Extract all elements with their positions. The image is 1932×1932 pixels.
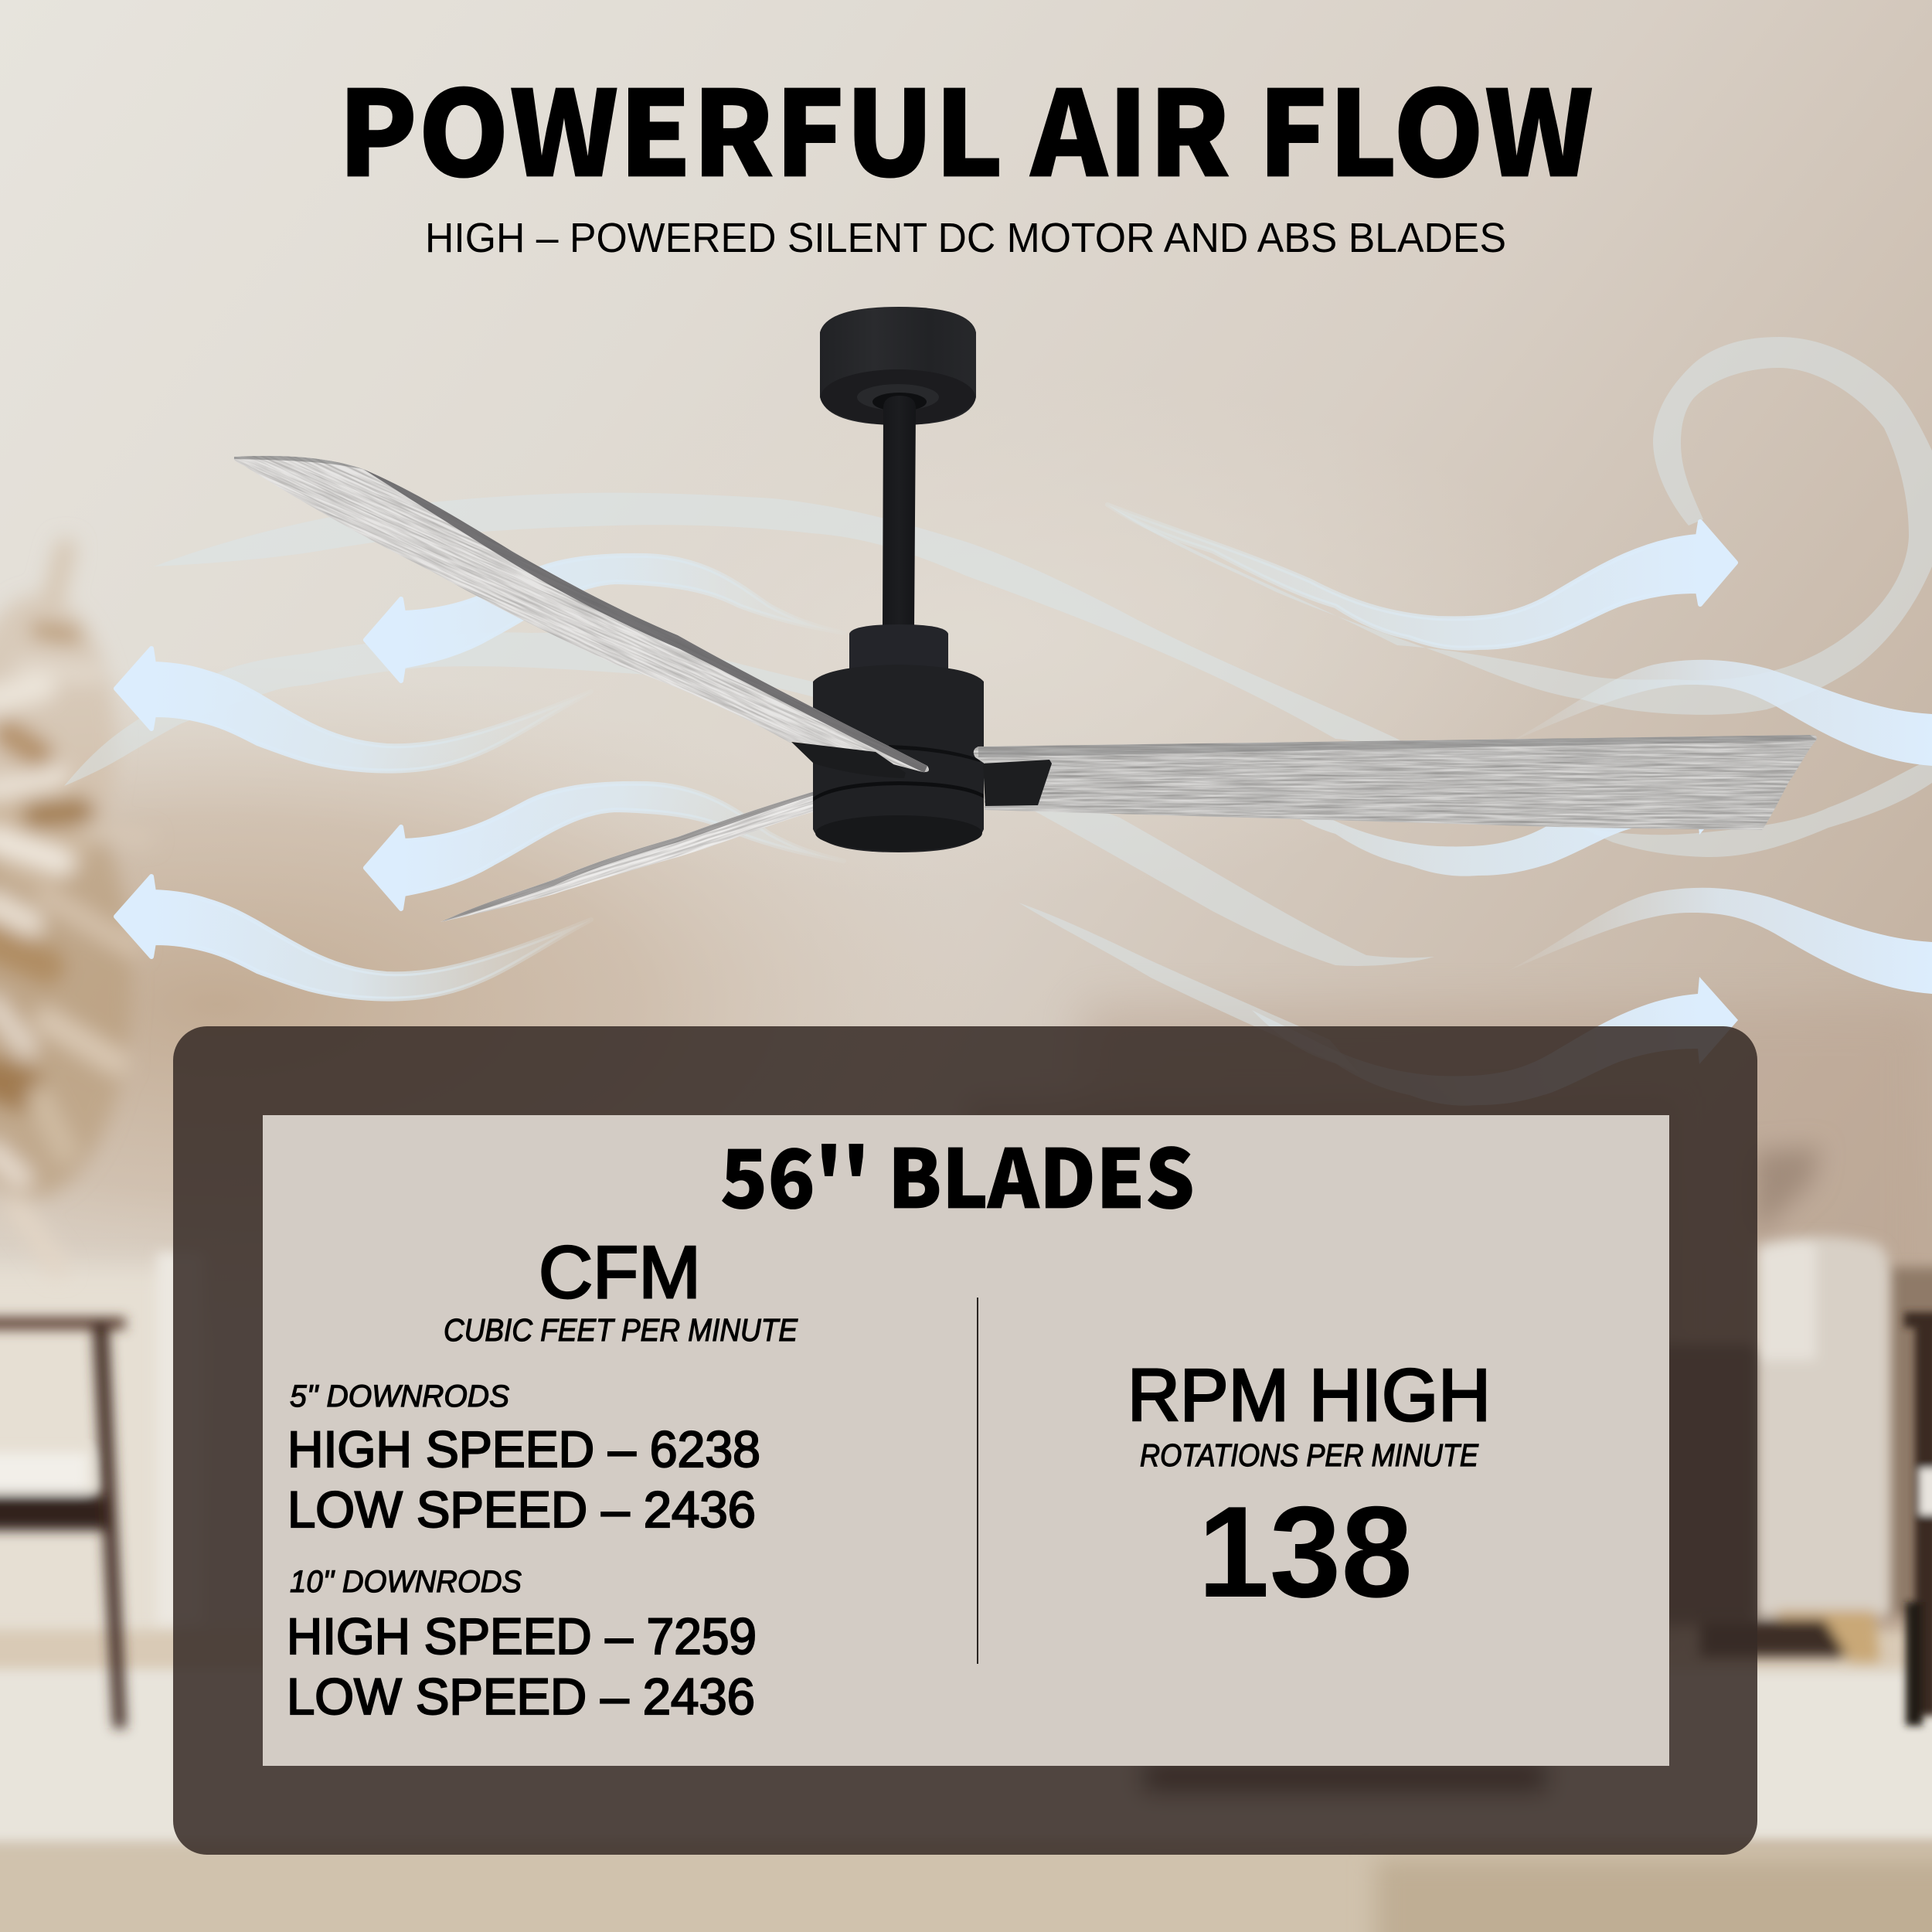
fan: motor housing — [813, 624, 984, 852]
title: POWERFUL AIR FLOW — [338, 40, 1594, 211]
streak: left band through motor — [64, 632, 1434, 966]
fan: blade, lower left — [440, 791, 813, 922]
air arrow: lower left — [116, 876, 591, 999]
fan: blade, right — [974, 735, 1817, 830]
stat: high speed 7259: HIGH SPEED – 7259 — [287, 1607, 757, 1665]
streak: upper band with lower swirl — [154, 493, 1932, 857]
stat: low speed 2436: LOW SPEED – 2436 — [287, 1668, 755, 1725]
right chair — [1904, 1312, 1932, 1726]
air arrow: middle right, mostly behind the blade — [1252, 747, 1738, 876]
right sofa arm — [1700, 1236, 1890, 1662]
sofa behind panel — [966, 1097, 1820, 1790]
label: 10 inch downrods: 10'' DOWNRODS — [290, 1565, 522, 1599]
heading: RPM high: RPM HIGH — [1128, 1354, 1491, 1437]
fan: blade, upper left — [233, 456, 929, 773]
stat: high speed 6238: HIGH SPEED – 6238 — [287, 1420, 760, 1478]
floor — [0, 1631, 1932, 1932]
fan: downrod — [883, 396, 916, 629]
fan: right blade bracket — [983, 760, 1052, 806]
fan: left blade bracket — [791, 742, 906, 778]
panel: spec card frame — [173, 1026, 1757, 1855]
caption: rotations per minute: ROTATIONS PER MINUTE — [1140, 1437, 1479, 1473]
heading: blade size: 56'' BLADES — [720, 1114, 1195, 1232]
text block: CFM column — [287, 1231, 798, 1725]
panel: spec card inner — [263, 1115, 1669, 1766]
air flow: faint grey streaks — [64, 337, 1932, 1074]
left chair and sofa arm — [0, 1253, 203, 1728]
pampas grass — [0, 549, 147, 1267]
streak: lower right tail — [1019, 903, 1360, 1074]
stat: 138: 138 — [1198, 1479, 1413, 1624]
subtitle: HIGH – POWERED SILENT DC MOTOR AND ABS BLADES — [425, 215, 1506, 261]
air wave: right edge upper — [1507, 660, 1932, 766]
air arrow: upper right — [1107, 505, 1736, 648]
right wall shade — [1886, 1267, 1932, 1615]
air wave: right edge lower — [1507, 888, 1932, 994]
fan: canopy — [820, 307, 976, 425]
heading: CFM: CFM — [539, 1231, 701, 1314]
sofa cushion behind panel — [1638, 1345, 1762, 1623]
ceiling fan — [141, 307, 1824, 1015]
label: 5 inch downrods: 5'' DOWNRODS — [290, 1379, 509, 1413]
stat: low speed 2436: LOW SPEED – 2436 — [287, 1481, 756, 1538]
caption: cubic feet per minute: CUBIC FEET PER MINUTE — [444, 1312, 798, 1348]
streak: big swirl — [1107, 337, 1932, 715]
lower left wall — [0, 1267, 185, 1638]
air arrow: upper left — [116, 648, 591, 771]
air arrow: inner upper left — [366, 556, 844, 681]
text block: RPM column — [1128, 1354, 1491, 1624]
air arrow: inner lower left — [366, 784, 844, 909]
air arrow: lower right — [1252, 977, 1738, 1106]
